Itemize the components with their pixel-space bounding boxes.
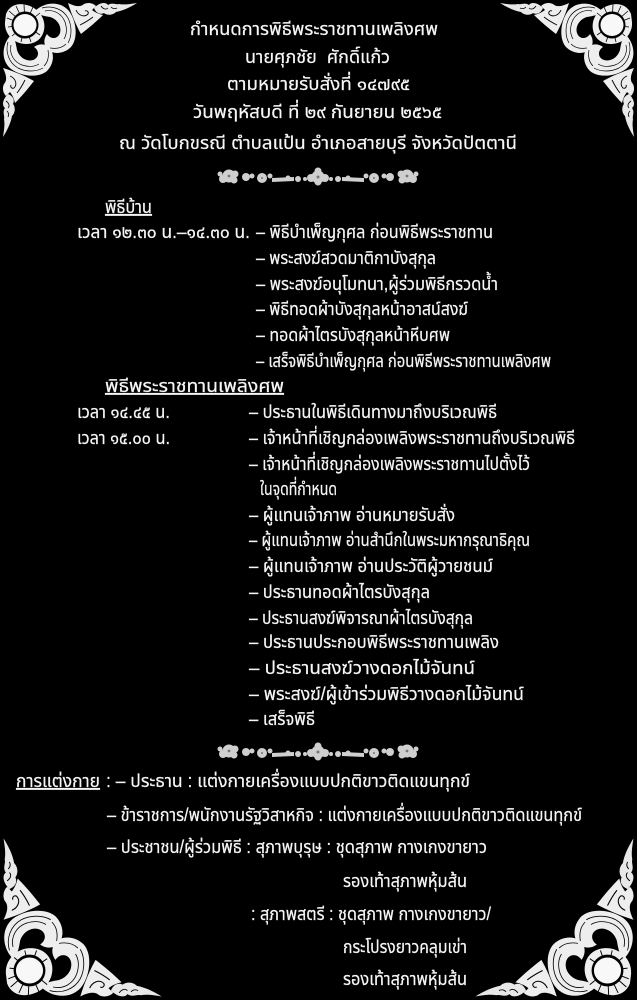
ornament: bottom-right corner — [475, 838, 634, 997]
schedule list: royal cremation ceremony — [249, 402, 575, 729]
dress code lines: รองเท้าสุภาพหุ้มส้น — [343, 871, 467, 892]
title block: ณ วัดโบกขรณี ตำบลแป้น อำเภอสายบุรี จังหวัดปัตตานี — [119, 133, 517, 154]
title block: ตามหมายรับสั่งที่ ๑๔๗๙๕ — [227, 71, 410, 94]
schedule list: royal cremation ceremony: – ประธานในพิธีเดินทางมาถึงบริเวณพิธี — [249, 402, 497, 422]
schedule list: royal cremation ceremony: – ผู้แทนเจ้าภาพ อ่านหมายรับสั่ง — [249, 503, 455, 527]
ornament: top-right corner — [500, 3, 634, 137]
time: 15.00: เวลา ๑๕.๐๐ น. — [77, 428, 170, 448]
section: home ceremony — [77, 197, 551, 372]
section: dress code — [16, 768, 582, 990]
schedule list: royal cremation ceremony: – ประธานสงฆ์วางดอกไม้จันทน์ — [249, 658, 475, 678]
schedule list: home ceremony: – พิธีทอดผ้าบังสุกุลหน้าอาสน์สงฆ์ — [256, 299, 468, 320]
schedule list: home ceremony: – เสร็จพิธีบำเพ็ญกุศล ก่อนพิธีพระราชทานเพลิงศพ — [256, 351, 551, 372]
dress code lines: : สุภาพสตรี : ชุดสุภาพ กางเกงขายาว/ — [251, 904, 491, 925]
title block: นายศุภชัย ศักดิ์แก้ว — [245, 46, 390, 68]
ornament: lower divider — [218, 742, 418, 760]
dress code lines: : – ประธาน : แต่งกายเครื่องแบบปกติขาวติดแขนทุกข์ — [106, 768, 470, 792]
schedule list: royal cremation ceremony: – ประธานทอดผ้าไตรบังสุกุล — [249, 582, 430, 603]
title block: กำหนดการพิธีพระราชทานเพลิงศพ — [190, 19, 438, 39]
section: royal cremation ceremony — [77, 376, 575, 729]
schedule list: home ceremony: – พระสงฆ์สวดมาติกาบังสุกุล — [256, 248, 436, 269]
schedule list: royal cremation ceremony: – เสร็จพิธี — [249, 709, 315, 729]
heading: royal cremation ceremony: พิธีพระราชทานเพลิงศพ — [105, 376, 284, 396]
schedule list: royal cremation ceremony: ในจุดที่กำหนด — [260, 476, 337, 500]
heading: dress code: การแต่งกาย — [16, 771, 100, 791]
time: home ceremony: เวลา ๑๒.๓๐ น.–๑๔.๓๐ น. — [77, 222, 250, 242]
ornament: top-left corner — [3, 3, 137, 137]
ornament: bottom-left corner — [3, 838, 162, 997]
dress code lines: รองเท้าสุภาพหุ้มส้น — [343, 969, 467, 990]
dress code lines — [106, 768, 582, 990]
dress code lines: – ข้าราชการ/พนักงานรัฐวิสาหกิจ : แต่งกายเครื่องแบบปกติขาวติดแขนทุกข์ — [107, 802, 582, 826]
dress code lines: – ประชาชน/ผู้ร่วมพิธี : สุภาพบุรุษ : ชุดสุภาพ กางเกงขายาว — [107, 837, 487, 859]
title block — [119, 19, 517, 154]
title block: วันพฤหัสบดี ที่ ๒๙ กันยายน ๒๕๖๕ — [193, 99, 442, 122]
schedule list: royal cremation ceremony: – พระสงฆ์/ผู้เข้าร่วมพิธีวางดอกไม้จันทน์ — [249, 684, 524, 706]
schedule list: royal cremation ceremony: – ผู้แทนเจ้าภาพ อ่านสำนึกในพระมหากรุณาธิคุณ — [249, 530, 530, 552]
schedule list: home ceremony: – พิธีบำเพ็ญกุศล ก่อนพิธีพระราชทาน — [256, 222, 493, 243]
schedule list: royal cremation ceremony: – ประธานสงฆ์พิจารณาผ้าไตรบังสุกุล — [249, 608, 473, 629]
schedule list: royal cremation ceremony: – ผู้แทนเจ้าภาพ อ่านประวัติผู้วายชนม์ — [249, 556, 493, 578]
ornament: upper divider — [218, 168, 418, 186]
schedule list: home ceremony: – พระสงฆ์อนุโมทนา,ผู้ร่วมพิธีกรวดน้ำ — [256, 271, 498, 296]
schedule list: royal cremation ceremony: – เจ้าหน้าที่เชิญกล่องเพลิงพระราชทานไปตั้งไว้ — [249, 451, 530, 474]
schedule list: home ceremony — [256, 222, 551, 372]
heading: home ceremony: พิธีบ้าน — [105, 197, 152, 217]
dress code lines: กระโปรงยาวคลุมเข่า — [343, 937, 467, 958]
schedule list: home ceremony: – ทอดผ้าไตรบังสุกุลหน้าหีบศพ — [256, 325, 450, 346]
time: 14.45: เวลา ๑๔.๔๕ น. — [77, 402, 170, 422]
schedule list: royal cremation ceremony: – ประธานประกอบพิธีพระราชทานเพลิง — [249, 632, 499, 652]
schedule list: royal cremation ceremony: – เจ้าหน้าที่เชิญกล่องเพลิงพระราชทานถึงบริเวณพิธี — [249, 425, 575, 448]
